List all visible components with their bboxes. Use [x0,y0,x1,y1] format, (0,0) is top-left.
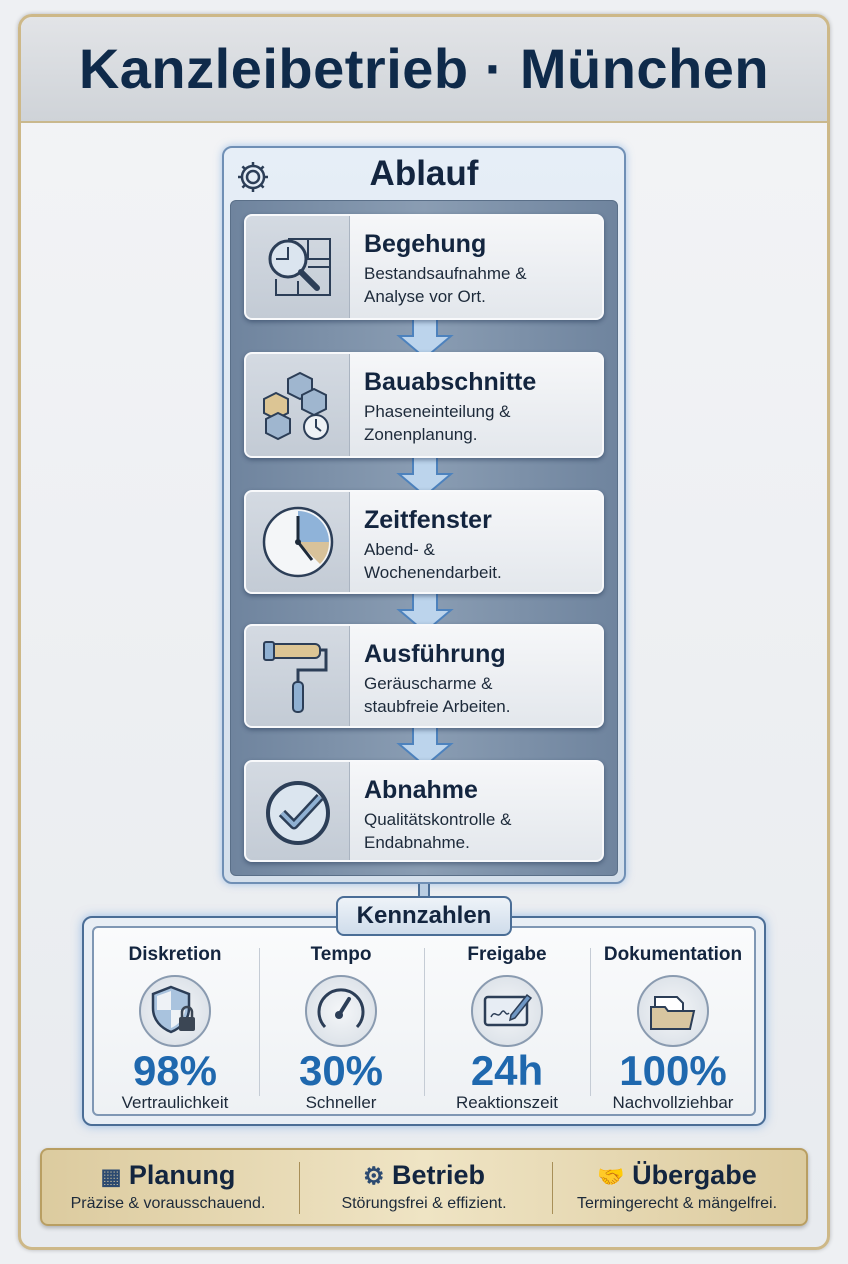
inner track [230,200,618,876]
icon: paint roller [246,626,350,726]
metric: Dokumentation [604,944,742,1112]
metric: Diskretion [122,944,228,1112]
footer: Betrieb: ⚙ Betrieb [363,1160,485,1190]
card: Zeitfenster: Abend- & [364,540,435,559]
icon: magnifier plan [246,216,350,318]
title: Kanzleibetrieb · München [79,37,769,100]
arrow 1 [396,320,454,352]
card: Bauabschnitte: Bauabschnitte [364,368,536,396]
footer: Planung [71,1160,265,1212]
card: Zeitfenster [244,490,604,594]
metric: Tempo [299,944,383,1112]
footer: Übergabe [577,1160,777,1212]
metric: Diskretion: Diskretion [129,944,221,965]
footer: Übergabe: 🤝 Übergabe [597,1160,757,1190]
card: Zeitfenster: Wochenendarbeit. [364,563,502,582]
card: Begehung: Begehung [364,230,486,258]
metric: Freigabe [456,944,558,1112]
card: Ausführung [244,624,604,728]
metric: Dokumentation: 100% [619,1047,727,1094]
card: Ausführung: Geräuscharme & [364,674,492,693]
card: Begehung: Analyse vor Ort. [364,287,486,306]
icon: shield lock [139,975,211,1047]
metric: Dokumentation: Dokumentation [604,944,742,965]
card: Ausführung: Ausführung [364,640,506,668]
footer: Planung: ▦ Planung [101,1160,235,1190]
header band [21,17,827,123]
card: Abnahme [244,760,604,862]
icon: blocks clock [246,354,350,456]
heading: Ablauf: Ablauf [370,154,478,193]
footer: Planung: Präzise & vorausschauend. [71,1195,265,1212]
card: Zeitfenster: Zeitfenster [364,506,492,534]
panel: Ablauf [222,146,626,884]
card: Abnahme: Endabnahme. [364,833,470,852]
bottom band [40,1148,808,1226]
connector [418,884,430,900]
footer: Betrieb: Störungsfrei & effizient. [341,1195,507,1212]
icon: folder [637,975,709,1047]
arrow 2 [396,458,454,490]
card: Ausführung: staubfreie Arbeiten. [364,697,510,716]
icon: check circle [246,762,350,860]
icon: gauge [305,975,377,1047]
heading: Kennzahlen: Kennzahlen [357,902,491,929]
icon: signature tablet [471,975,543,1047]
panel: Kennzahlen [82,916,766,1126]
footer: Übergabe: Termingerecht & mängelfrei. [577,1195,777,1212]
icon: clock [246,492,350,592]
arrow 4 [396,728,454,760]
dividers [259,948,260,1096]
metric: Tempo: 30% [299,1047,383,1094]
card: Begehung [244,214,604,320]
arrow 3 [396,594,454,624]
card: Abnahme: Abnahme [364,776,478,804]
metric: Freigabe: Freigabe [467,944,547,965]
metric: Diskretion: Vertraulichkeit [122,1093,228,1112]
metric: Freigabe: 24h [471,1047,543,1094]
metric: Diskretion: 98% [133,1047,217,1094]
card: Bauabschnitte: Phaseneinteilung & [364,402,511,421]
metric: Tempo: Schneller [306,1093,376,1112]
footer: Betrieb [341,1160,507,1212]
metric: Freigabe: Reaktionszeit [456,1093,558,1112]
card: Bauabschnitte: Zonenplanung. [364,425,477,444]
card: Bauabschnitte [244,352,604,458]
icon: gear [238,162,268,192]
card: Begehung: Bestandsaufnahme & [364,264,527,283]
heading: Kennzahlen [336,896,512,936]
metric: Tempo: Tempo [311,944,371,965]
metric: Dokumentation: Nachvollziehbar [613,1093,733,1112]
card: Abnahme: Qualitätskontrolle & [364,810,511,829]
